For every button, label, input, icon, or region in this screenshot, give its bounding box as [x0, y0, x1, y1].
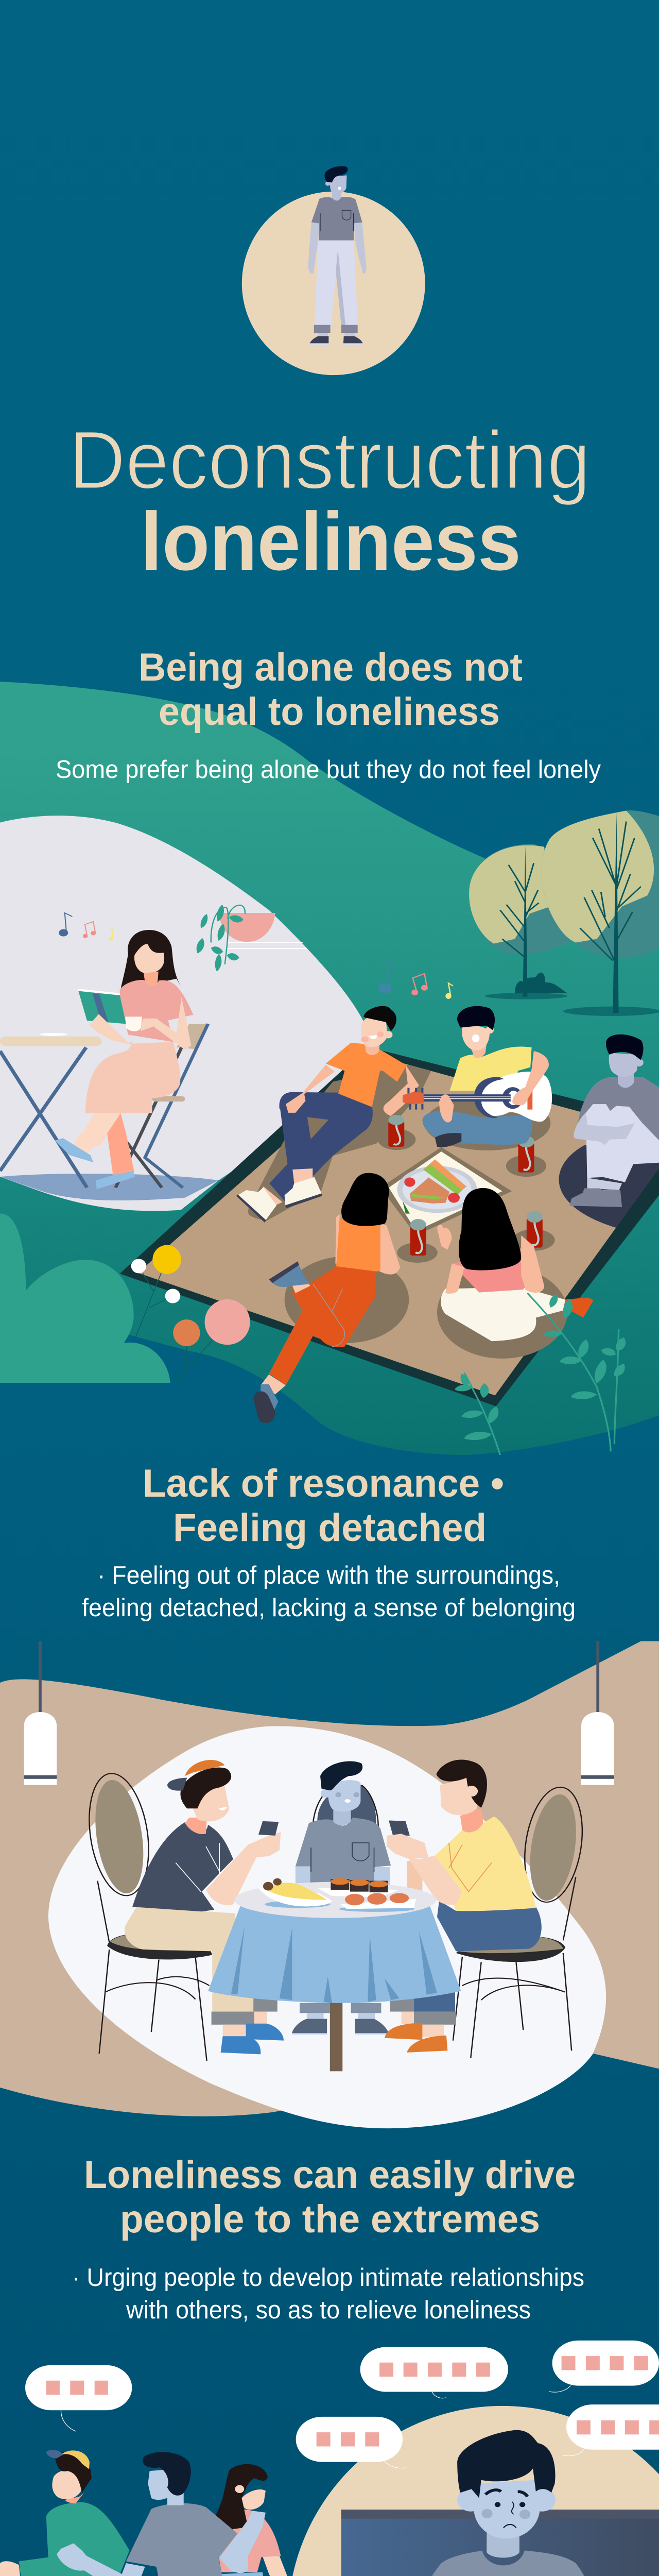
person: gloomy man — [569, 1035, 659, 1207]
picnic mat — [120, 1047, 659, 1406]
man looking at phone — [432, 2430, 584, 2576]
lonely man standing — [308, 166, 367, 345]
balloons — [131, 1245, 250, 1383]
hero: figure in circle — [242, 166, 425, 375]
food cloth and sandwiches — [380, 1147, 512, 1235]
folding table — [0, 1033, 102, 1188]
heading: being alone: Being alone does not — [138, 646, 523, 689]
text: urging people: · Urging people to develop intimate relationships — [72, 2264, 584, 2292]
icon: music notes left — [59, 913, 114, 941]
panel: crowd and isolated man — [0, 2341, 659, 2576]
title — [69, 414, 591, 587]
speech bubble top right — [549, 2341, 659, 2392]
text: urging people — [72, 2264, 584, 2324]
person: guitar player — [403, 1006, 552, 1147]
heading: extremes: Loneliness can easily drive — [84, 2153, 576, 2197]
lamp left — [24, 1641, 57, 1785]
text: urging people: with others, so as to relieve loneliness — [126, 2296, 531, 2324]
person: woman sitting — [437, 1188, 594, 1341]
subtext: being alone: Some prefer being alone but they do not feel lonely — [56, 756, 601, 784]
person: woman lying — [253, 1173, 400, 1423]
table leg — [330, 2000, 342, 2071]
person: left man with cap — [125, 1760, 284, 2054]
lavender cafe area — [0, 816, 378, 1211]
tan band — [0, 1641, 659, 2116]
speech bubble top center — [360, 2347, 508, 2398]
title line 1: Deconstructing — [69, 414, 591, 506]
folding chair — [115, 1024, 209, 1188]
right chair — [453, 1784, 589, 2058]
woman reading — [55, 930, 193, 1190]
text: feeling out of place: feeling detached, lacking a sense of belonging — [82, 1594, 576, 1622]
person: man in gray center — [57, 2452, 269, 2576]
person: right man — [385, 1759, 542, 2053]
heading: lack of resonance: Feeling detached — [173, 1506, 487, 1550]
heading: extremes — [84, 2153, 576, 2241]
heading: extremes: people to the extremes — [120, 2197, 540, 2241]
left chair — [82, 1771, 212, 2061]
lamp right — [581, 1641, 614, 1785]
soda cans — [388, 1115, 543, 1256]
person: orange shirt man — [236, 1006, 419, 1223]
table with food — [208, 1878, 461, 2003]
person: middle man, gloomy — [292, 1761, 391, 2035]
dark seat shadow — [559, 1133, 659, 1228]
beige circle — [242, 192, 425, 375]
bush — [0, 1214, 170, 1383]
panel: restaurant scene — [0, 1641, 659, 2128]
plants — [455, 1293, 630, 1455]
speech bubble middle — [296, 2417, 406, 2468]
text: feeling out of place: · Feeling out of place with the surroundings, — [97, 1562, 560, 1589]
white blob — [48, 1726, 606, 2128]
heading: being alone: equal to loneliness — [159, 690, 500, 734]
floor shadow — [0, 1174, 218, 1200]
big beige circle with room and man — [292, 2406, 659, 2576]
heading: being alone — [138, 646, 523, 734]
heading: lack of resonance: Lack of resonance • — [143, 1462, 504, 1505]
hanging plant and shelf — [193, 904, 307, 972]
text: feeling out of place — [82, 1562, 576, 1622]
mat shadows — [248, 1065, 567, 1359]
trees — [469, 810, 659, 1016]
speech bubble left — [25, 2365, 132, 2431]
scene: hill background — [0, 682, 659, 1455]
person: woman in group — [183, 2464, 309, 2576]
person: man green shirt — [0, 2450, 145, 2576]
panel: picnic scene — [0, 810, 659, 1455]
title line 2: loneliness — [141, 495, 521, 587]
music notes over mat — [378, 962, 453, 999]
speech bubble right — [563, 2404, 659, 2456]
heading: lack of resonance — [143, 1462, 504, 1550]
